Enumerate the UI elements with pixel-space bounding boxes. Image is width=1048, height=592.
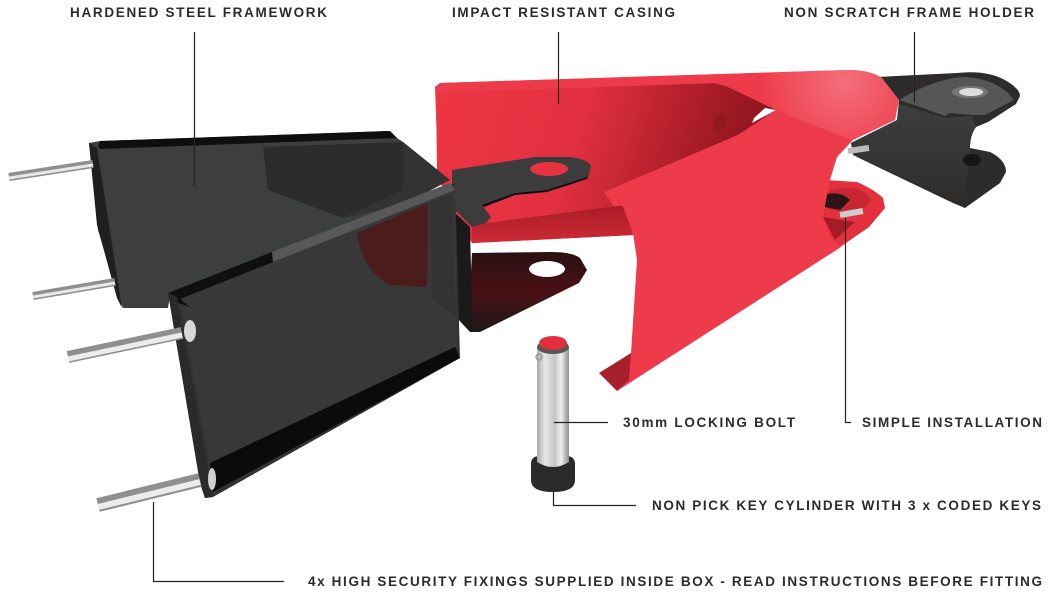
red casing: front panel	[440, 70, 899, 391]
label: hardened steel framework: HARDENED STEEL FRAMEWORK	[70, 5, 327, 20]
security fixings	[9, 164, 216, 507]
small pin behind casing	[848, 148, 869, 151]
label: fixings note: 4x HIGH SECURITY FIXINGS SUPPLIED INSIDE BOX - READ INSTRUCTIONS BEFORE FITTING	[308, 574, 1042, 589]
black frame: front panel	[168, 183, 460, 498]
black frame: back panel	[89, 131, 450, 308]
label: non scratch frame holder: NON SCRATCH FRAME HOLDER	[784, 5, 1034, 20]
red casing: back panel	[435, 70, 880, 243]
label: key cylinder: NON PICK KEY CYLINDER WITH 3 x CODED KEYS	[652, 498, 1041, 513]
red reflection	[357, 203, 428, 287]
label: simple installation: SIMPLE INSTALLATION	[862, 415, 1042, 430]
red casing: lower lug	[800, 180, 885, 272]
leader lines	[154, 32, 914, 582]
label: locking bolt: 30mm LOCKING BOLT	[623, 415, 796, 430]
label: impact resistant casing: IMPACT RESISTANT CASING	[452, 5, 675, 20]
lower black mounting tab	[456, 252, 587, 332]
locking bolt	[531, 336, 575, 492]
upper black mounting tab with hole	[452, 157, 591, 227]
black frame: side bracket	[452, 210, 473, 332]
black frame holder (right)	[851, 72, 1020, 208]
